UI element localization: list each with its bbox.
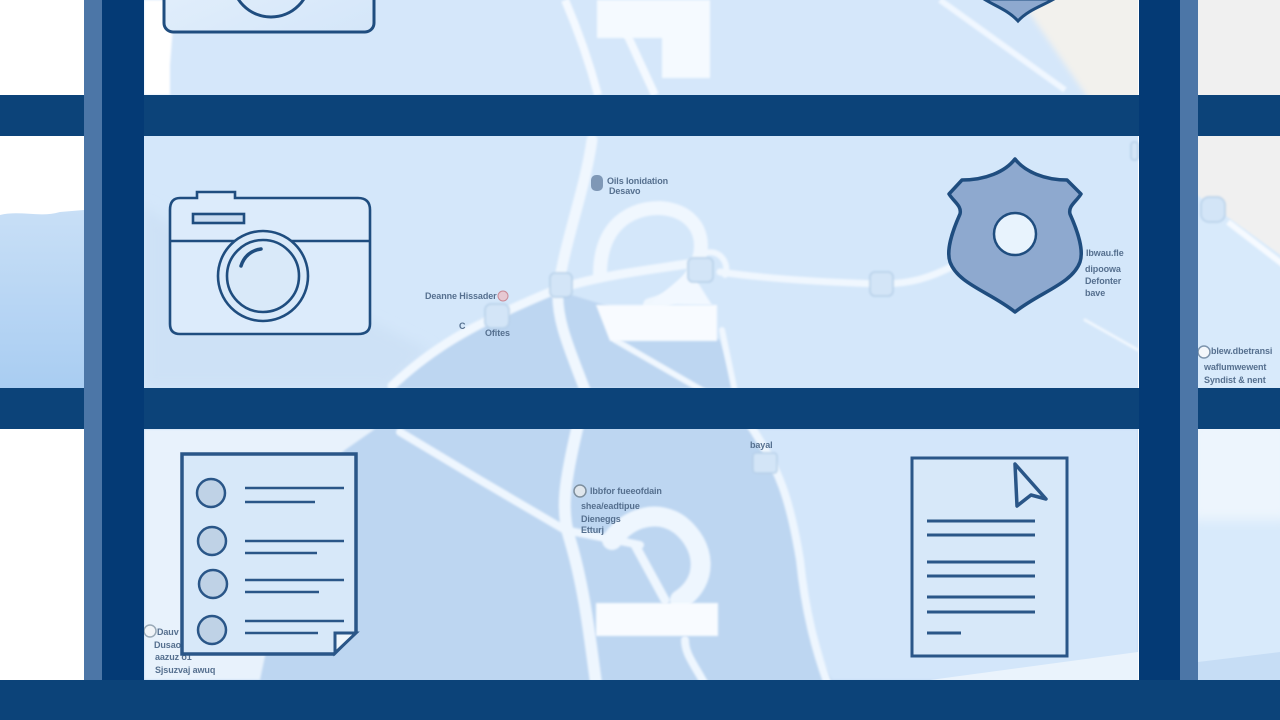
label: bottom left note: Dusaoz bbox=[154, 640, 186, 650]
map pins: road markers bbox=[485, 142, 1225, 473]
icon: camera bbox=[170, 192, 370, 334]
label: bottom right marker: bayal bbox=[750, 440, 773, 450]
panel: middle map row bbox=[144, 136, 1138, 392]
label: bottom left note: Sjsuzvaj awuq bbox=[155, 665, 215, 675]
label: bottom centre note: Dieneggs bbox=[581, 514, 621, 524]
icon: shield badge bbox=[949, 159, 1081, 312]
label: top centre second line: Desavo bbox=[609, 186, 641, 196]
icon: checklist document bbox=[182, 454, 356, 654]
icon: camera top cropped bbox=[164, 0, 374, 32]
label: right margin note: Syndist & nent bbox=[1204, 375, 1266, 385]
icon: shield top cropped bbox=[984, 0, 1054, 21]
label: shield note: dipoowa bbox=[1085, 264, 1122, 274]
panel: top map row bbox=[144, 0, 1138, 95]
label: bottom left note: Dauv bbox=[157, 627, 179, 637]
label: right margin note: waflumwewent bbox=[1203, 362, 1266, 372]
label: bottom centre note bbox=[574, 485, 662, 535]
label: top centre: Oils Ionidation bbox=[607, 176, 668, 186]
panel: left margin map strip bbox=[0, 0, 84, 720]
label: bottom centre note: Ibbfor fueeofdain bbox=[590, 486, 662, 496]
label: right margin note bbox=[1198, 346, 1272, 385]
label: bottom centre note: Etturj bbox=[581, 525, 604, 535]
label: left road marker: Ofites bbox=[485, 328, 510, 338]
label: left road marker: C bbox=[459, 321, 466, 331]
icon: document with cursor bbox=[912, 458, 1067, 656]
panel: right margin map strip bbox=[1198, 0, 1280, 680]
label: left road marker bbox=[425, 291, 510, 338]
label: shield note bbox=[1085, 248, 1124, 298]
label: bottom left note: aazuz o1 bbox=[155, 652, 192, 662]
label: shield note: Ibwau.fle bbox=[1086, 248, 1124, 258]
label: left road marker: Deanne Hissader bbox=[425, 291, 497, 301]
label: shield note: Defonter bbox=[1085, 276, 1122, 286]
label: shield note: bave bbox=[1085, 288, 1105, 298]
label: right margin note: blew.dbetransi bbox=[1211, 346, 1272, 356]
label: bottom left note bbox=[144, 625, 215, 675]
map pin: shield marker bbox=[591, 175, 603, 191]
panel: bottom map row bbox=[144, 425, 1138, 690]
label: bottom centre note: shea/eadtipue bbox=[581, 501, 640, 511]
